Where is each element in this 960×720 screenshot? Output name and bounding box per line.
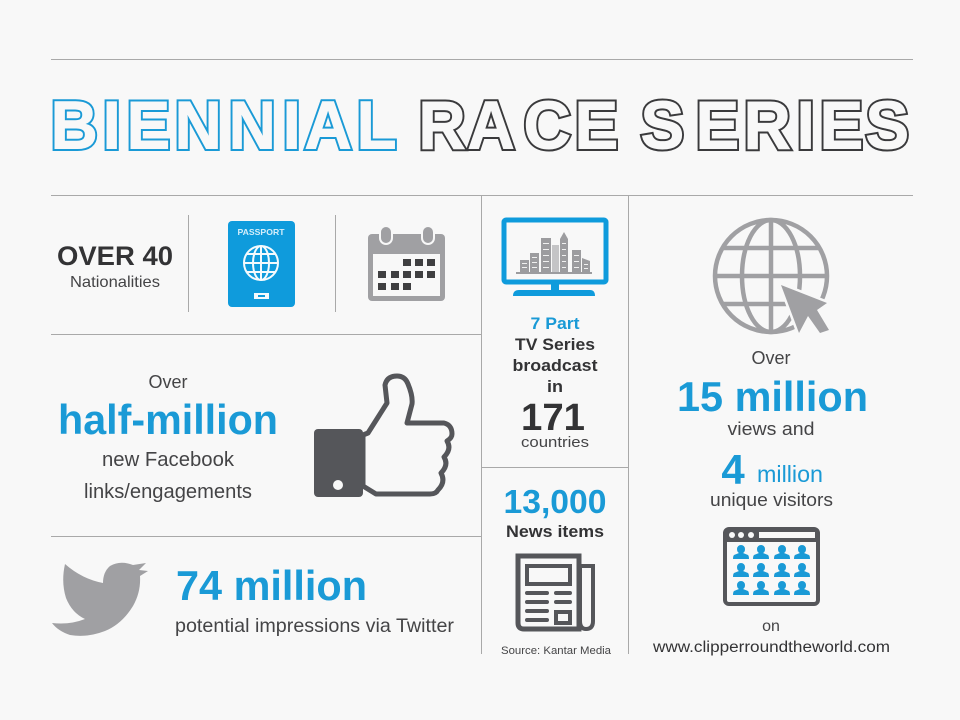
tv text: broadcast — [512, 356, 598, 375]
title: SERIES — [641, 88, 909, 164]
source note: Source: Kantar Media — [501, 645, 612, 657]
twitter text — [175, 562, 455, 637]
title: SERIES — [641, 88, 909, 164]
icon: globe with cursor — [715, 220, 829, 333]
title — [51, 88, 909, 164]
website text: views and — [728, 419, 814, 439]
icon: twitter bird — [52, 563, 148, 636]
news text: 13,000 — [504, 483, 606, 520]
title: RACE — [419, 88, 618, 164]
website text: 4 — [721, 446, 745, 493]
facebook text: Over — [148, 372, 188, 392]
panel: tv series — [504, 220, 606, 451]
website address: on — [762, 618, 780, 635]
nationalities text: Nationalities — [70, 274, 160, 291]
icon: browser with users — [725, 529, 818, 604]
website address — [652, 618, 890, 656]
tv text: 7 Part — [530, 314, 580, 333]
nationalities text: OVER 40 — [57, 241, 173, 271]
twitter text: potential impressions via Twitter — [175, 615, 455, 637]
title: RACE — [419, 88, 618, 164]
icon: passport — [228, 221, 295, 307]
tv text: 171 — [521, 397, 585, 439]
facebook text — [58, 372, 278, 503]
website text: unique visitors — [710, 490, 833, 510]
website text — [677, 348, 868, 510]
website address: www.clipperroundtheworld.com — [652, 639, 890, 656]
icon: newspaper — [518, 556, 593, 629]
panel: nationalities — [57, 221, 445, 307]
panel: website — [652, 220, 890, 656]
website text: Over — [751, 348, 791, 368]
news text: News items — [506, 522, 604, 541]
tv text — [512, 314, 598, 451]
website text: million — [757, 461, 823, 487]
facebook text: links/engagements — [84, 481, 252, 503]
icon: calendar — [368, 226, 445, 301]
facebook text: half-million — [58, 396, 278, 443]
news text — [504, 483, 606, 541]
twitter text: 74 million — [176, 562, 367, 609]
icon: thumbs up — [314, 376, 452, 497]
title: BIENNIAL — [51, 88, 397, 164]
tv text: in — [547, 377, 563, 396]
website text: 15 million — [677, 373, 868, 420]
tv text: TV Series — [515, 335, 595, 354]
icon: tv with city — [504, 220, 606, 296]
nationalities text — [57, 241, 173, 291]
facebook text: new Facebook — [102, 449, 235, 471]
title: BIENNIAL — [51, 88, 397, 164]
panel: news items — [501, 483, 612, 657]
tv text: countries — [521, 434, 589, 451]
panel: facebook — [58, 372, 452, 503]
panel: twitter — [52, 562, 455, 637]
icon: passport: PASSPORT — [238, 227, 285, 237]
